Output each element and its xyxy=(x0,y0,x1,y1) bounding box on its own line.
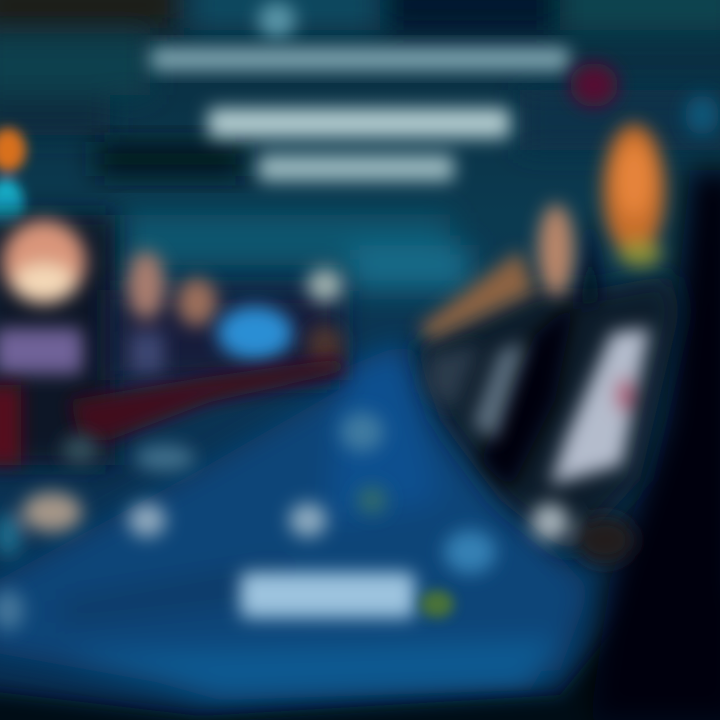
title text band xyxy=(150,47,570,71)
top emblem xyxy=(258,2,296,38)
brown machine xyxy=(307,325,343,365)
red seats xyxy=(70,358,345,440)
right dark wall xyxy=(590,170,720,720)
orange top light xyxy=(603,124,665,267)
brown strip xyxy=(418,250,535,340)
floor highlights xyxy=(0,412,496,630)
left slot machine xyxy=(0,215,115,465)
bottom badge xyxy=(420,590,454,618)
machine base xyxy=(0,385,21,465)
machine top light xyxy=(2,220,86,304)
left edge lights xyxy=(0,128,26,231)
machine body xyxy=(0,215,115,465)
red badge xyxy=(570,63,618,107)
screen grey xyxy=(425,342,525,440)
lower highlight xyxy=(531,503,635,564)
bottom dark band xyxy=(0,590,720,720)
row of machines xyxy=(70,251,345,440)
bottom text band xyxy=(240,572,415,618)
screen white xyxy=(550,328,650,485)
divider shadow xyxy=(480,210,600,490)
blue screen xyxy=(217,306,293,360)
subtitle text bands xyxy=(208,108,510,181)
right slot machines xyxy=(415,124,680,564)
machine screen xyxy=(0,328,83,374)
machine body xyxy=(415,275,680,555)
machine row body xyxy=(110,290,340,380)
machine lights xyxy=(127,251,343,374)
floor xyxy=(0,345,590,700)
tan top light xyxy=(538,204,574,296)
top right light xyxy=(685,95,719,135)
top band xyxy=(0,0,720,150)
mid wall glow xyxy=(120,215,470,290)
dark ceiling patch xyxy=(95,142,245,176)
